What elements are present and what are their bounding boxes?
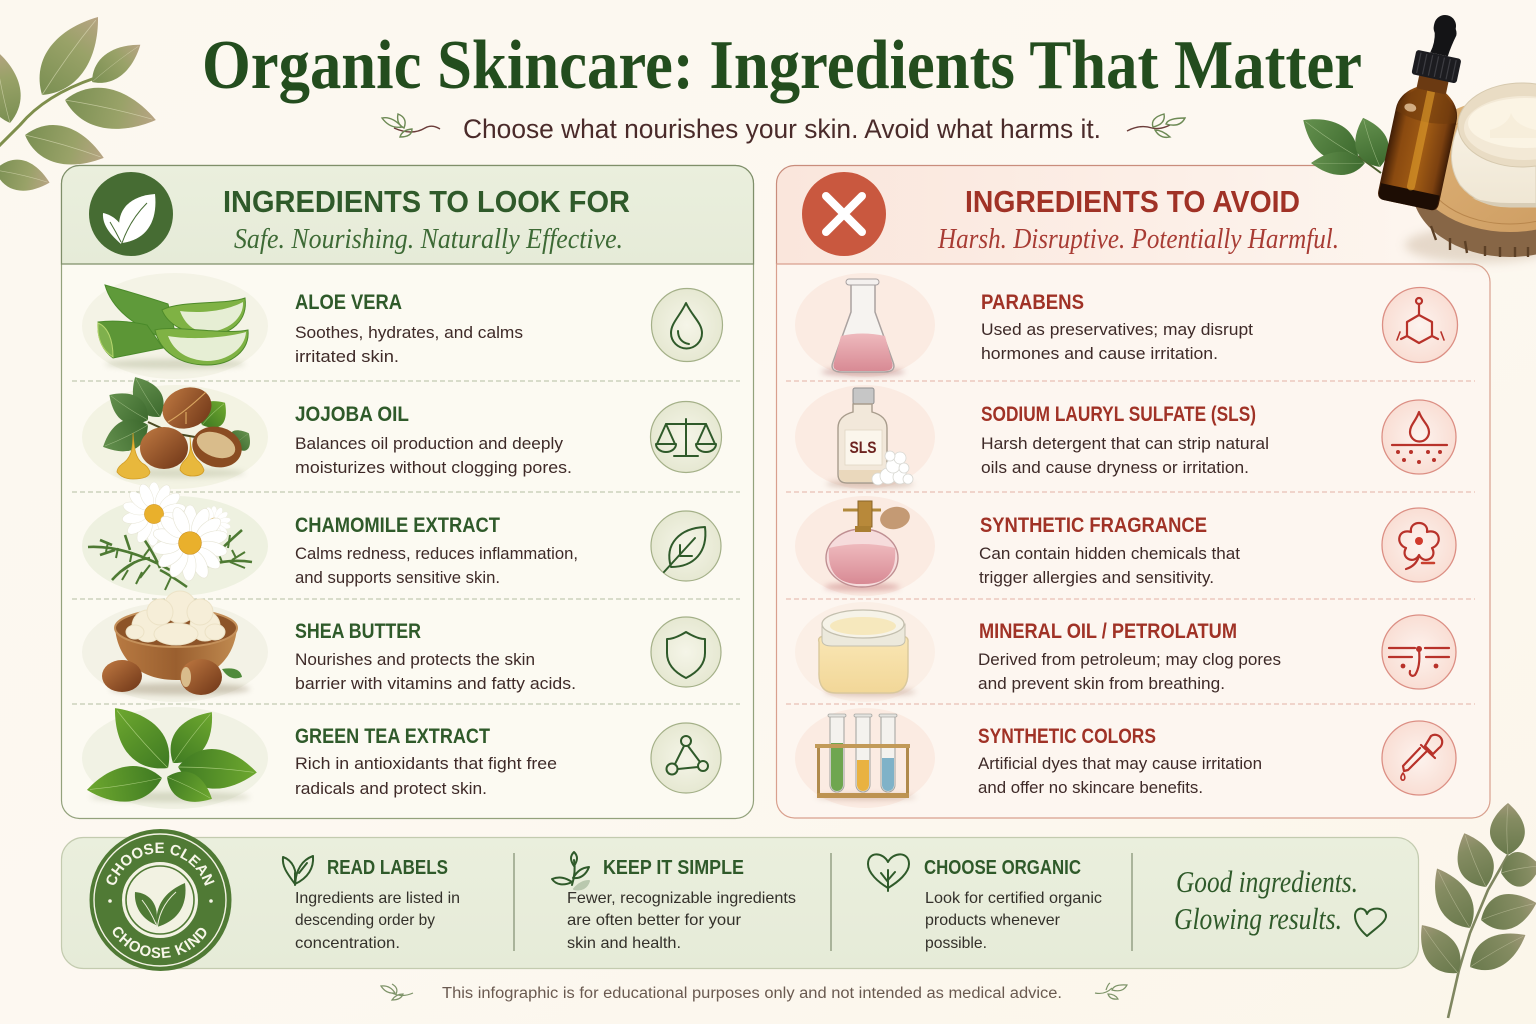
closing script message [1174, 864, 1386, 936]
icon: heart [1355, 909, 1386, 936]
ingredient description: Balances oil production and deeply [295, 434, 564, 453]
ingredient description [295, 434, 572, 477]
icon: dropper [1382, 721, 1456, 795]
bottom-right leaf branch [1408, 803, 1536, 1018]
badge: choose clean choose kind: CHOOSE CLEAN [106, 842, 214, 886]
row: jojoba oil [82, 370, 722, 489]
tip text: Look for certified organic [925, 890, 1102, 907]
row: green tea extract [82, 695, 721, 811]
row: synthetic colors [795, 708, 1456, 808]
footer sprig right [1095, 983, 1127, 999]
row: mineral oil [795, 602, 1456, 702]
ingredient description: and supports sensitive skin. [295, 568, 500, 587]
ingredient name: JOJOBA OIL [295, 403, 409, 426]
ingredient description: radicals and protect skin. [295, 779, 487, 798]
tip text [925, 890, 1102, 952]
tip title: CHOOSE ORGANIC [924, 857, 1081, 879]
ingredient description: Nourishes and protects the skin [295, 650, 535, 669]
ingredient description [981, 434, 1269, 477]
illustration: green tea [82, 695, 268, 811]
panel header: look for [62, 166, 754, 264]
tip text [295, 890, 460, 952]
icon: shield [651, 617, 721, 687]
ingredient description: Soothes, hydrates, and calms [295, 323, 523, 342]
ingredient name: SODIUM LAURYL SULFATE (SLS) [981, 403, 1256, 426]
icon: leaf heart [868, 854, 909, 891]
illustration: SLS bottle: SLS [850, 438, 876, 457]
tagline: Safe. Nourishing. Naturally Effective. [234, 223, 623, 255]
illustration: test tubes [795, 708, 935, 808]
ingredient name: MINERAL OIL / PETROLATUM [979, 620, 1237, 643]
ingredient description [979, 544, 1240, 587]
tip text: descending order by [295, 912, 435, 929]
illustration: perfume bottle [795, 496, 935, 596]
tip text: concentration. [295, 935, 400, 952]
tip: choose organic [868, 854, 1102, 952]
row: aloe vera [82, 273, 722, 379]
ingredient description [978, 650, 1281, 693]
product still life: bottle, jar, wood slice [1293, 9, 1536, 263]
panel: ingredients to avoid [776, 166, 1490, 818]
row: parabens [795, 273, 1458, 377]
icon: avoid X badge [802, 172, 886, 256]
subtitle: Choose what nourishes your skin. Avoid what harms it. [463, 114, 1101, 144]
row: sodium lauryl sulfate [795, 385, 1456, 489]
ingredient description: Used as preservatives; may disrupt [981, 320, 1253, 339]
ingredient name: PARABENS [981, 291, 1084, 314]
icon: chemical ring [1382, 288, 1458, 362]
ingredient description: Can contain hidden chemicals that [979, 544, 1240, 563]
row: shea butter [82, 591, 721, 702]
closing script message: Good ingredients. [1176, 864, 1358, 899]
panel: tips band [60, 829, 1420, 971]
tip: keep it simple [552, 852, 796, 952]
icon: leaf badge [89, 172, 173, 256]
tip: read labels [283, 856, 460, 952]
panel: ingredients to look for [62, 166, 754, 818]
title: Organic Skincare: Ingredients That Matter [202, 27, 1362, 104]
tip title: KEEP IT SIMPLE [603, 857, 744, 879]
leaves beside bottle [1293, 106, 1395, 175]
sprig right of subtitle [1127, 114, 1185, 137]
ingredient description [295, 650, 576, 693]
sprig left of subtitle [382, 114, 440, 137]
amber dropper bottle [1377, 9, 1478, 211]
ingredient description: barrier with vitamins and fatty acids. [295, 674, 576, 693]
ingredient name: SYNTHETIC FRAGRANCE [980, 514, 1207, 537]
ingredient description [295, 323, 523, 366]
heading: ingredients to avoid: INGREDIENTS TO AVOID [965, 184, 1300, 219]
top-left leaf branch [0, 5, 160, 197]
closing script message: Glowing results. [1174, 901, 1342, 936]
ingredient description: trigger allergies and sensitivity. [979, 568, 1214, 587]
ingredient description: Rich in antioxidants that fight free [295, 754, 557, 773]
tip text: Fewer, recognizable ingredients [567, 890, 796, 907]
row: chamomile extract [82, 482, 721, 596]
disclaimer: This infographic is for educational purposes only and not intended as medical advice. [442, 985, 1062, 1002]
ingredient description [295, 544, 578, 587]
ingredient name: CHAMOMILE EXTRACT [295, 514, 500, 537]
illustration: SLS bottle [795, 385, 935, 489]
footer sprig left [381, 984, 413, 1000]
ingredient description: hormones and cause irritation. [981, 344, 1218, 363]
illustration: chamomile [82, 482, 268, 596]
tip text: Ingredients are listed in [295, 890, 460, 907]
tagline: Harsh. Disruptive. Potentially Harmful. [937, 223, 1339, 255]
tip text: are often better for your [567, 912, 742, 929]
ingredient description [981, 320, 1253, 363]
ingredient description: Calms redness, reduces inflammation, [295, 544, 578, 563]
ingredient description [978, 754, 1262, 797]
wood slice [1412, 98, 1536, 257]
ingredient name: ALOE VERA [295, 291, 402, 314]
ingredient description: Artificial dyes that may cause irritation [978, 754, 1262, 773]
tip text: possible. [925, 935, 987, 952]
icon: balance scales [650, 402, 722, 472]
icon: clogged pore [1382, 615, 1456, 689]
illustration: shea butter [82, 591, 268, 702]
badge: choose clean choose kind: CHOOSE KIND [112, 926, 206, 958]
tip text: products whenever [925, 912, 1061, 929]
tip text [567, 890, 796, 952]
illustration: aloe vera [82, 273, 268, 379]
illustration: jojoba [82, 370, 268, 489]
row: synthetic fragrance [795, 496, 1456, 596]
icon: leaf [651, 511, 721, 581]
badge: choose clean choose kind [90, 829, 232, 971]
cream jar [1451, 83, 1536, 207]
icon: water drop [652, 288, 722, 362]
ingredient name: SHEA BUTTER [295, 620, 421, 643]
illustration: petrolatum jar [795, 602, 935, 702]
icon: molecule [651, 723, 721, 793]
ingredient description: Derived from petroleum; may clog pores [978, 650, 1281, 669]
ingredient description: moisturizes without clogging pores. [295, 458, 572, 477]
heading: ingredients to look for: INGREDIENTS TO LOOK FOR [223, 184, 630, 219]
icon: drop over skin [1382, 400, 1456, 474]
ingredient description: oils and cause dryness or irritation. [981, 458, 1249, 477]
ingredient description: and offer no skincare benefits. [978, 778, 1203, 797]
tip title: READ LABELS [327, 857, 448, 879]
ingredient description [295, 754, 557, 798]
icon: flower [1382, 508, 1456, 582]
ingredient description: and prevent skin from breathing. [978, 674, 1225, 693]
tip text: skin and health. [567, 935, 681, 952]
icon: sprout [552, 852, 589, 890]
ingredient description: Harsh detergent that can strip natural [981, 434, 1269, 453]
ingredient description: irritated skin. [295, 347, 399, 366]
icon: leaf pair [283, 856, 313, 885]
ingredient name: GREEN TEA EXTRACT [295, 725, 490, 748]
ingredient name: SYNTHETIC COLORS [978, 725, 1156, 748]
illustration: flask [795, 273, 935, 377]
